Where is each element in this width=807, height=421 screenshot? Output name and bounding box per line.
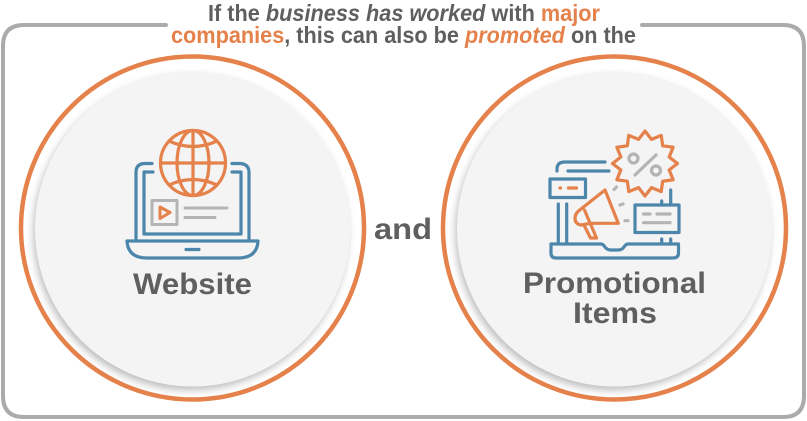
connector: and: and xyxy=(374,213,432,246)
label: promotional items: Items xyxy=(573,297,657,330)
label: promotional items: Promotional xyxy=(523,267,706,300)
panel: website xyxy=(21,56,364,400)
label: website: Website xyxy=(133,268,252,301)
panel: promotional items xyxy=(443,56,786,400)
icon: megaphone and promo xyxy=(550,131,679,258)
title: If the business has worked with major xyxy=(208,0,600,26)
title: companies, this can also be promoted on the xyxy=(171,22,636,48)
label: promotional items xyxy=(523,267,706,330)
icon: laptop with globe xyxy=(127,130,258,258)
title xyxy=(171,0,636,48)
